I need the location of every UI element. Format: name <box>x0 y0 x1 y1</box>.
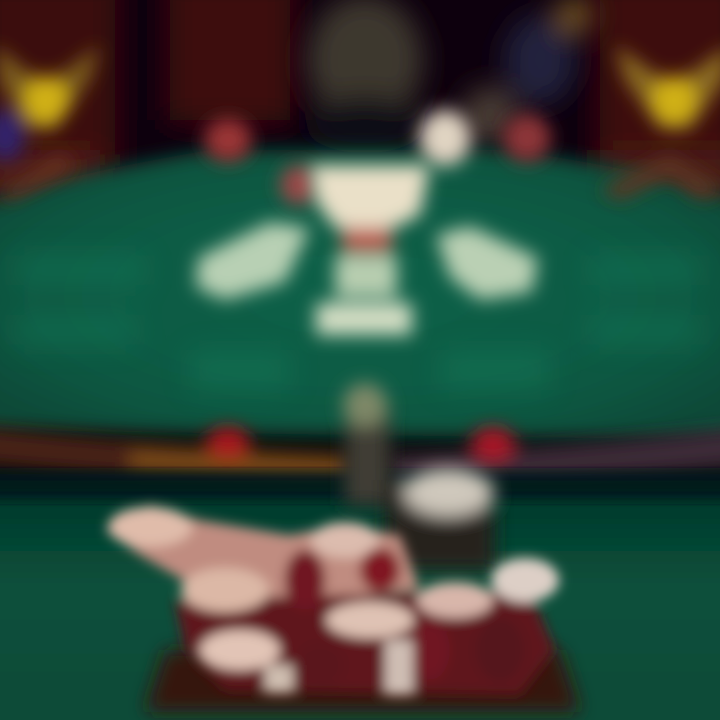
left cards <box>196 222 310 300</box>
chip tray base <box>145 650 580 712</box>
background: dark curtains <box>0 0 720 210</box>
bottom felt <box>0 482 720 720</box>
top red chips <box>204 110 551 205</box>
centre chip stack <box>343 383 495 570</box>
center white cards <box>310 165 430 335</box>
background figures <box>305 0 593 153</box>
table rim <box>0 427 720 482</box>
rim shadow <box>0 474 720 498</box>
left lamp <box>0 45 100 200</box>
right lamp <box>600 45 720 200</box>
table felt shading <box>15 255 700 390</box>
red and white chips <box>105 505 559 695</box>
green table felt <box>0 150 720 440</box>
right cards <box>436 226 538 300</box>
